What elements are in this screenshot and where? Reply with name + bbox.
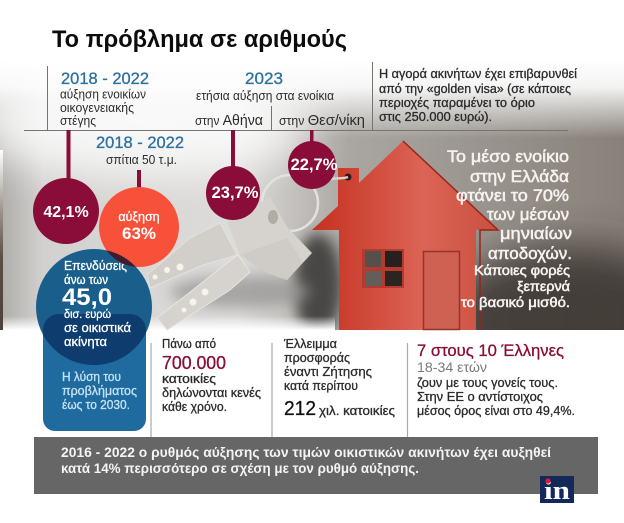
stat: 7 in 10 Greeks: 18-34 ετών <box>417 359 487 375</box>
stat circle: 23,7% <box>206 130 260 220</box>
block: 50 sqm homes: 2018 - 2022 <box>96 133 184 152</box>
stat circle: 42,1%: 42,1% <box>43 204 89 221</box>
icon: in logo: in <box>544 476 571 505</box>
stat: 700.000 vacant homes: 700.000 <box>162 353 226 373</box>
golden visa note: Η αγορά ακινήτων έχει επιβαρυνθεί <box>379 67 577 81</box>
rent callout over house: Το μέσο ενοίκιο <box>447 147 569 166</box>
rent callout over house: φτάνει το 70% <box>456 186 569 205</box>
stat circle: 63% <box>99 170 179 267</box>
rent callout over house <box>447 147 572 310</box>
background photo <box>0 76 624 330</box>
icon: keys <box>147 175 318 330</box>
golden visa note: από την «golden visa» (σε κάποιες <box>379 82 571 96</box>
investment circle and solution card: 45,0 <box>62 284 112 311</box>
stat: 7 in 10 Greeks: Στην ΕΕ ο αντίστοιχος <box>417 390 543 404</box>
bottom summary bar: 2016 - 2022 ο ρυθμός αύξησης των τιμών οικιστικών ακινήτων έχει αυξηθεί <box>61 445 551 460</box>
stat: 7 in 10 Greeks: 7 στους 10 Έλληνες <box>417 341 564 360</box>
investment circle and solution card: ακίνητα <box>64 335 107 349</box>
block: 2023 annual rent rise: στην Αθήνα <box>195 112 263 129</box>
investment circle and solution card: άνω των <box>64 273 108 287</box>
block: rents family housing <box>60 69 149 128</box>
icon: red house keyring <box>312 141 498 330</box>
stat: supply shortage: έναντι Ζήτησης <box>284 365 372 379</box>
golden visa note: στις 250.000 ευρώ). <box>379 110 492 124</box>
stat circle: 22,7%: 22,7% <box>291 156 338 174</box>
stat: supply shortage: προσφοράς <box>284 351 350 365</box>
stat: supply shortage: 212 <box>284 398 316 420</box>
stat: 700.000 vacant homes: κάθε χρόνο. <box>162 400 227 414</box>
stat: 700.000 vacant homes: κατοικίες <box>162 372 216 386</box>
block: rents family housing: στέγης <box>60 114 96 128</box>
stat: supply shortage <box>283 337 395 420</box>
icon: in logo <box>540 476 574 505</box>
stat: 7 in 10 Greeks <box>417 341 575 418</box>
block: 2023 annual rent rise <box>195 69 365 129</box>
investment circle and solution card <box>36 249 152 431</box>
stat: 7 in 10 Greeks: μέσος όρος είναι στο 49,4%. <box>417 404 575 418</box>
bottom summary bar: κατά 14% περισσότερο σε σχέση με τον ρυθμό αύξησης. <box>61 461 419 476</box>
rent callout over house: ξεπερνά <box>517 279 570 294</box>
stat: 7 in 10 Greeks: ζουν με τους γονείς τους. <box>417 376 558 390</box>
stat: supply shortage: Έλλειμμα <box>283 337 337 351</box>
rent callout over house: των μέσων <box>487 205 569 224</box>
bottom summary bar <box>34 437 598 494</box>
investment circle and solution card: δισ. ευρώ <box>64 307 111 321</box>
rent callout over house: Κάποιες φορές <box>474 263 571 278</box>
stat circle: 42,1% <box>33 130 99 244</box>
stat: 700.000 vacant homes <box>162 337 261 414</box>
block: 50 sqm homes <box>96 133 184 167</box>
lower column rules <box>151 343 408 437</box>
block: rents family housing: οικογενειακής <box>60 101 134 115</box>
stat: supply shortage: κατά περίπου <box>284 379 358 393</box>
block: 50 sqm homes: σπίτια 50 τ.μ. <box>106 153 177 167</box>
block: rents family housing: 2018 - 2022 <box>61 69 149 88</box>
stat circle: 63%: αύξηση <box>118 210 160 224</box>
investment circle and solution card: έως το 2030. <box>62 398 130 412</box>
rent callout over house: στην Ελλάδα <box>470 167 569 186</box>
stat: 700.000 vacant homes: δηλώνονται κενές <box>162 386 261 400</box>
rent callout over house: αποδοχών. <box>488 244 572 263</box>
stat: 700.000 vacant homes: Πάνω από <box>162 337 216 351</box>
block: 2023 annual rent rise: στην Θεσ/νίκη <box>279 112 365 129</box>
golden visa note <box>379 67 577 124</box>
investment circle and solution card: Επενδύσεις <box>64 259 127 273</box>
stat circle: 23,7%: 23,7% <box>212 184 259 202</box>
rent callout over house: το βασικό μισθό. <box>461 295 570 310</box>
stat: supply shortage: χιλ. κατοικίες <box>319 404 395 418</box>
investment circle and solution card: σε οικιστικά <box>64 321 131 335</box>
investment circle and solution card: προβλήματος <box>62 384 137 398</box>
stat circle: 63%: 63% <box>122 224 156 243</box>
rent callout over house: μηνιαίων <box>500 224 572 243</box>
investment circle and solution card: Η λύση του <box>62 370 121 384</box>
block: rents family housing: αύξηση ενοικίων <box>60 88 146 102</box>
block: 2023 annual rent rise: 2023 <box>245 69 283 88</box>
golden visa note: περιοχές παραμένει το όριο <box>379 96 535 110</box>
header rules <box>24 62 568 130</box>
block: 2023 annual rent rise: ετήσια αύξηση στα ενοίκια <box>196 89 334 103</box>
title: Το πρόβλημα σε αριθμούς <box>52 26 347 53</box>
stat circle: 22,7% <box>288 130 338 189</box>
